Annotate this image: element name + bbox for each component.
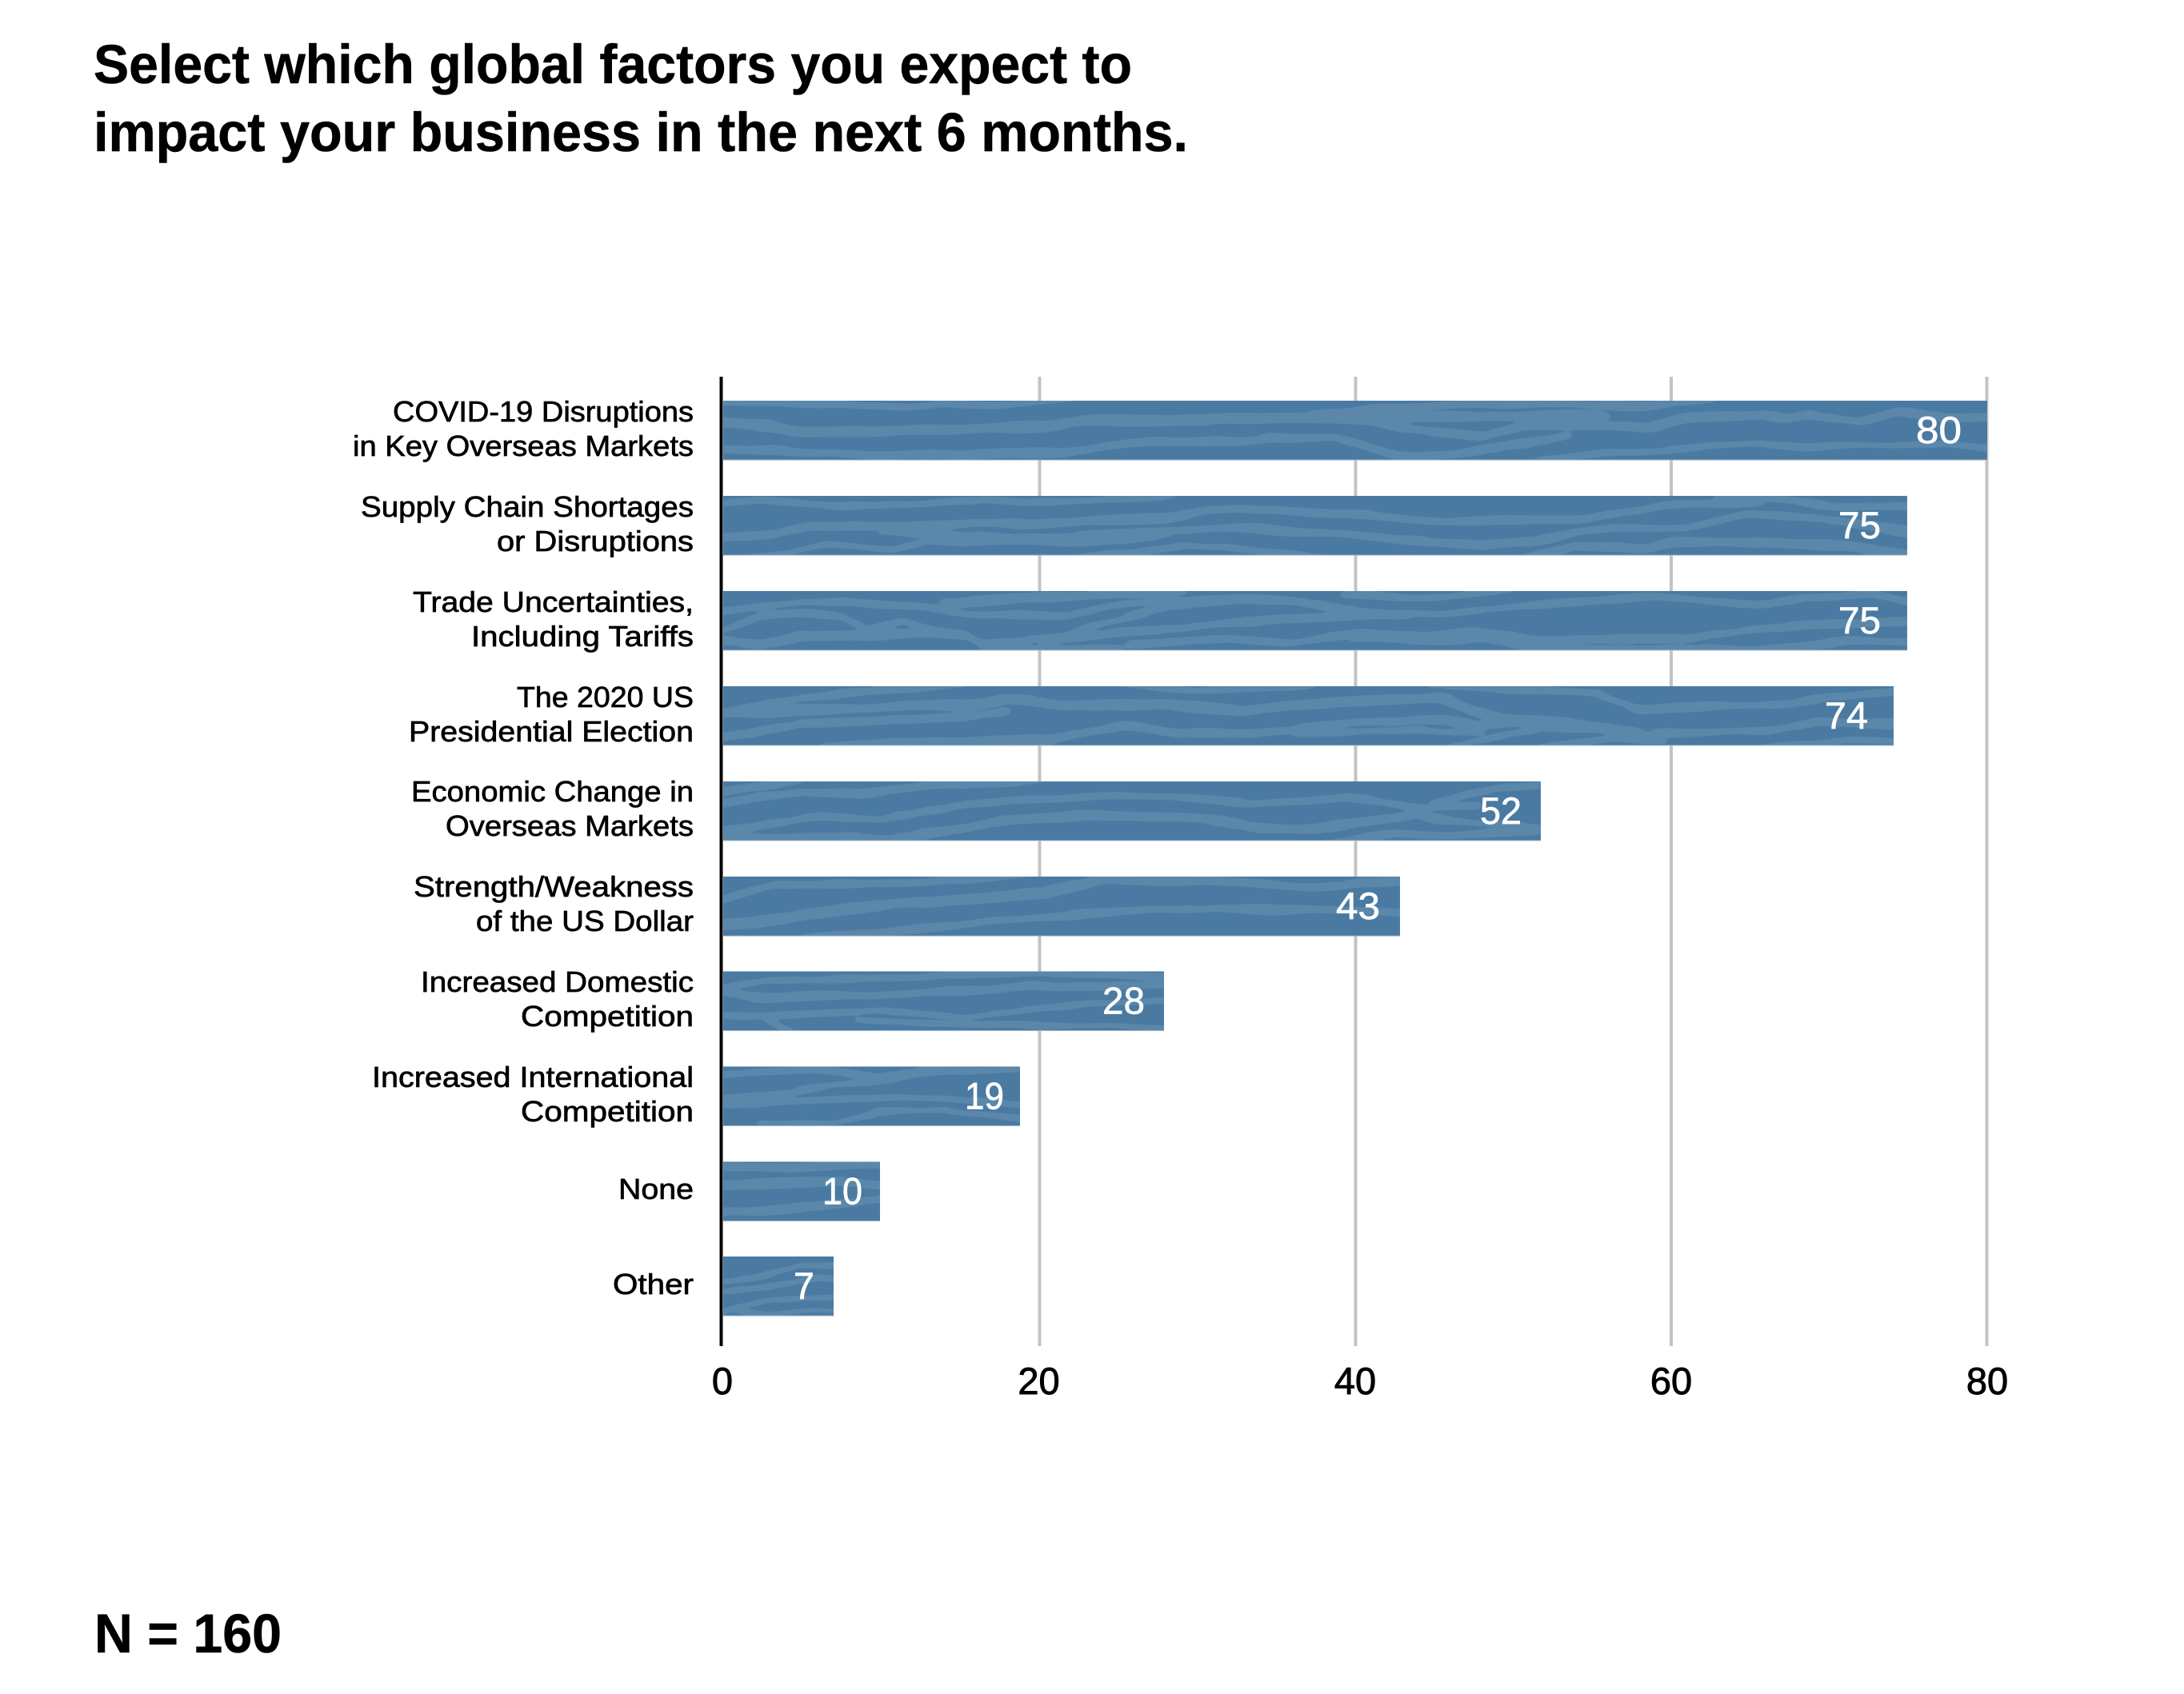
- category label: Strength/Weakness of the US Dollar: Strength/Weakness: [414, 870, 694, 903]
- category label: The 2020 US Presidential Election: Presidential Election: [409, 715, 694, 748]
- category label: Increased International Competition: [372, 1061, 694, 1128]
- category label: The 2020 US Presidential Election: [409, 681, 694, 748]
- bar: Increased International Competition, value 19: [712, 1064, 1028, 1126]
- category label: None: None: [618, 1173, 694, 1205]
- bar: None, value 10: 10: [822, 1169, 862, 1213]
- category label: Increased Domestic Competition: Increased Domestic: [421, 965, 694, 998]
- bar chart: [353, 377, 2008, 1402]
- category label: Supply Chain Shortages or Disruptions: or Disruptions: [497, 525, 694, 557]
- bar: Other, value 7: [723, 1257, 834, 1316]
- category label: Increased International Competition: Competition: [521, 1095, 694, 1128]
- x axis labels: [712, 1360, 2008, 1402]
- sample size note: N = 160: [94, 1603, 282, 1664]
- grid lines and zero axis: [720, 377, 1989, 1346]
- bar: The 2020 US Presidential Election, value 74: 74: [1825, 694, 1868, 737]
- category label: Economic Change in Overseas Markets: [411, 775, 694, 842]
- bar: Supply Chain Shortages, value 75: 75: [1838, 504, 1881, 546]
- bar: Strength/Weakness of the US Dollar, value 43: [712, 874, 1408, 939]
- bar: Other, value 7: 7: [794, 1265, 814, 1307]
- category label: COVID-19 Disruptions in Key Overseas Markets: COVID-19 Disruptions: [393, 395, 694, 428]
- category label: Supply Chain Shortages or Disruptions: [361, 490, 694, 557]
- category label: Increased Domestic Competition: Competition: [521, 1000, 694, 1033]
- bar: Strength/Weakness of the US Dollar, value 43: 43: [1336, 885, 1380, 927]
- category label: Trade Uncertainties, Including Tariffs: Trade Uncertainties,: [413, 585, 694, 618]
- x axis labels: 20: [1018, 1360, 1060, 1402]
- title: [94, 34, 1188, 163]
- bar: COVID-19 Disruptions, value 80: [712, 398, 1995, 461]
- bar: Increased Domestic Competition, value 28: 28: [1102, 979, 1145, 1022]
- category label: Trade Uncertainties, Including Tariffs: [413, 585, 694, 653]
- bar: None, value 10: [723, 1161, 880, 1222]
- title: Select which global factors you expect to: [94, 34, 1132, 95]
- bar: Trade Uncertainties, value 75: [712, 588, 1915, 651]
- x axis labels: 60: [1650, 1360, 1692, 1402]
- bar: COVID-19 Disruptions, value 80: 80: [1916, 409, 1962, 451]
- bar: Increased International Competition, value 19: 19: [965, 1075, 1004, 1117]
- category label: Supply Chain Shortages or Disruptions: Supply Chain Shortages: [361, 490, 694, 523]
- category label: Economic Change in Overseas Markets: Economic Change in: [411, 775, 694, 808]
- title: impact your business in the next 6 months.: [94, 102, 1188, 163]
- category label: COVID-19 Disruptions in Key Overseas Markets: [353, 395, 694, 462]
- category label: Strength/Weakness of the US Dollar: [414, 870, 694, 937]
- category label: Increased Domestic Competition: [421, 965, 694, 1033]
- bar: Increased Domestic Competition, value 28: [712, 971, 1172, 1032]
- category label: The 2020 US Presidential Election: The 2020 US: [517, 681, 694, 713]
- x axis labels: 80: [1966, 1360, 2008, 1402]
- category label: Trade Uncertainties, Including Tariffs: Including Tariffs: [471, 620, 694, 653]
- bar: Trade Uncertainties, value 75: 75: [1838, 599, 1881, 641]
- category label: COVID-19 Disruptions in Key Overseas Markets: in Key Overseas Markets: [353, 429, 694, 462]
- category label: Increased International Competition: Increased International: [372, 1061, 694, 1093]
- x axis labels: 0: [712, 1360, 733, 1402]
- bar: The 2020 US Presidential Election, value 74: [712, 684, 1902, 749]
- bar: Supply Chain Shortages, value 75: [723, 496, 1907, 556]
- x axis labels: 40: [1334, 1360, 1376, 1402]
- category label: Economic Change in Overseas Markets: Overseas Markets: [446, 809, 694, 842]
- category label: Strength/Weakness of the US Dollar: of the US Dollar: [476, 905, 694, 937]
- bar: Economic Change in Overseas Markets, value 52: [712, 779, 1549, 842]
- category label: Other: Other: [613, 1268, 694, 1300]
- bar: Economic Change in Overseas Markets, value 52: 52: [1480, 789, 1522, 832]
